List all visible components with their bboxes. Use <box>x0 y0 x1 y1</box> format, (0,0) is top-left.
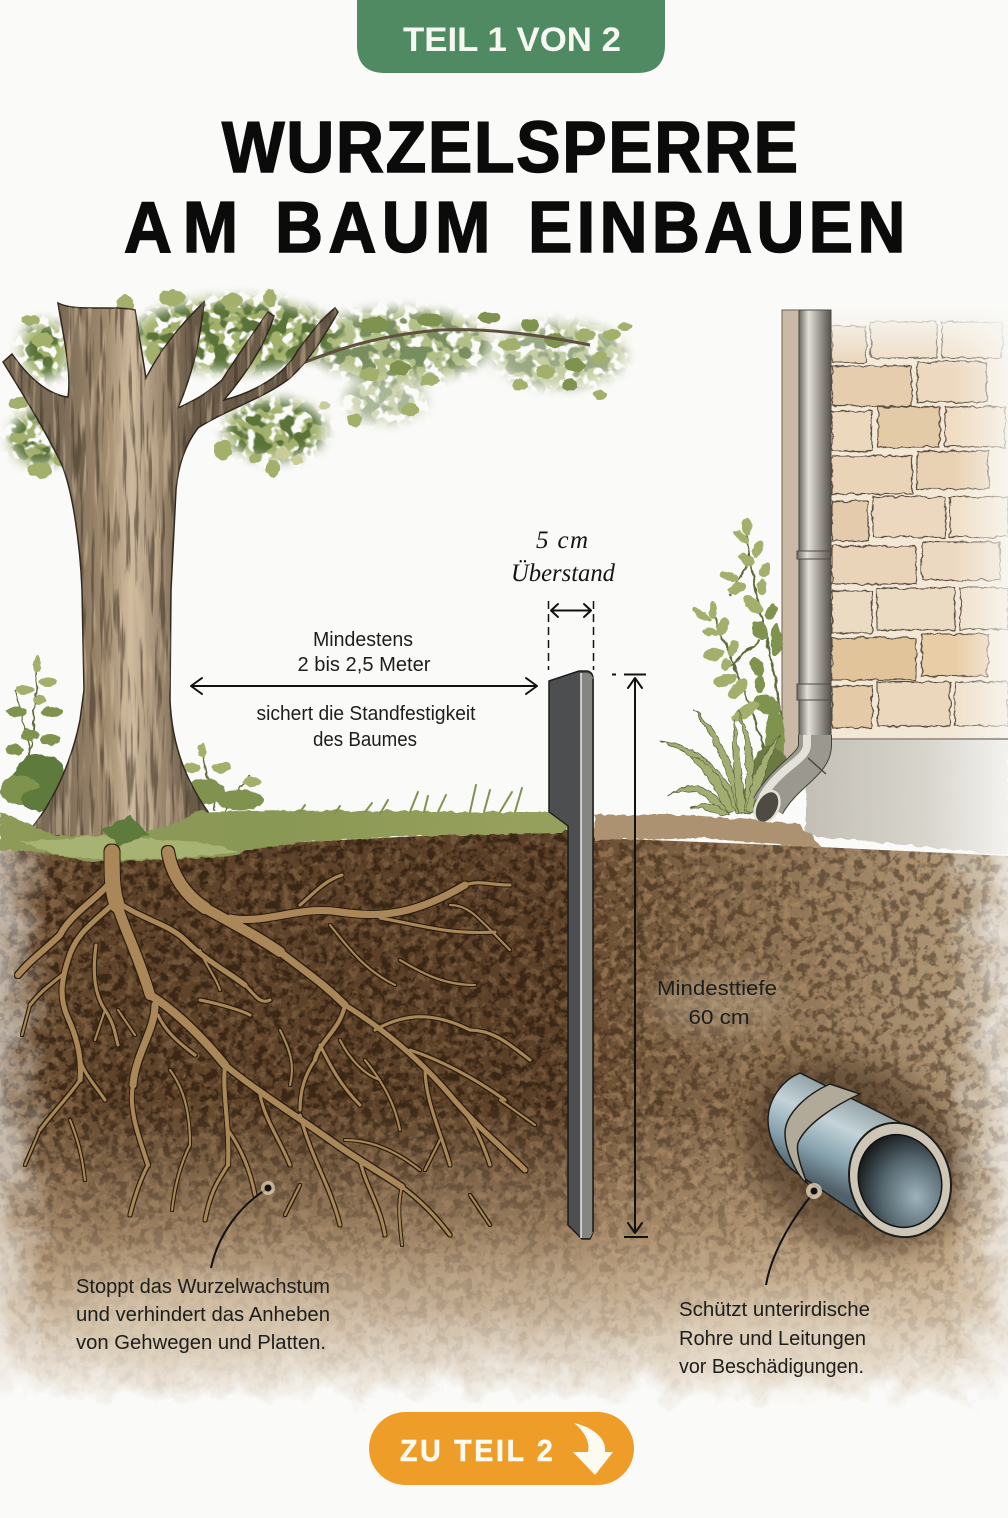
title: EINBAUEN <box>528 186 905 268</box>
dimension: distance 2 to 2.5 metres: sichert die Standfestigkeit <box>256 703 476 725</box>
dimension: minimum depth 60 cm: Mindesttiefe <box>657 978 777 1000</box>
root barrier <box>520 671 593 1239</box>
dimension: 5 cm overhang <box>511 527 615 670</box>
bricks <box>830 300 1008 740</box>
brick wall with base <box>782 300 1008 855</box>
grass wedge at barrier <box>520 812 567 833</box>
callout: pipes: Schützt unterirdische <box>679 1299 870 1321</box>
leaves <box>691 517 785 770</box>
dimension: 5 cm overhang: 5 cm <box>536 527 588 554</box>
tree roots <box>18 852 535 1245</box>
individual leaves <box>8 289 632 478</box>
wall corner edge <box>782 310 799 765</box>
title: WURZELSPERRE <box>222 106 798 188</box>
grass blades <box>660 709 780 816</box>
grass tufts <box>300 785 522 814</box>
badge: Teil 1 von 2 <box>357 0 665 73</box>
callout: roots: Stoppt das Wurzelwachstum <box>76 1276 330 1298</box>
thin branch <box>295 330 590 366</box>
pipe collar <box>785 1084 860 1183</box>
dimension: distance 2 to 2.5 metres <box>191 629 537 751</box>
title: BAUM <box>275 186 490 268</box>
dimension: distance 2 to 2.5 metres: des Baumes <box>313 729 417 751</box>
small plants left of tree <box>0 655 264 812</box>
button: Zu Teil 2: ZU TEIL 2 <box>400 1434 553 1468</box>
tree trunk <box>0 295 590 850</box>
dimension: minimum depth 60 cm <box>612 674 788 1237</box>
callout: roots: und verhindert das Anheben <box>76 1304 330 1326</box>
badge: Teil 1 von 2: TEIL 1 VON 2 <box>403 21 621 59</box>
tree canopy back leaves <box>0 285 640 485</box>
soil cross-section <box>0 820 1008 1420</box>
dimension: distance 2 to 2.5 metres: Mindestens <box>313 629 413 651</box>
downpipe <box>749 310 831 827</box>
stems <box>712 525 782 790</box>
callout: pipes: vor Beschädigungen. <box>679 1356 864 1378</box>
plant beside the wall <box>660 517 790 816</box>
dimension: distance 2 to 2.5 metres: 2 bis 2,5 Meter <box>298 654 431 676</box>
concrete base <box>806 738 1008 855</box>
icon: curved arrow <box>573 1423 613 1475</box>
dimension: 5 cm overhang: Überstand <box>511 559 615 587</box>
callout: roots: von Gehwegen und Platten. <box>76 1332 326 1354</box>
button: Zu Teil 2 <box>369 1412 634 1485</box>
callout: pipes <box>655 1183 895 1382</box>
callout: roots <box>60 1181 340 1362</box>
dimension: minimum depth 60 cm: 60 cm <box>688 1007 750 1029</box>
underground pipe <box>710 1020 1000 1290</box>
grass strip under tree <box>0 810 568 862</box>
callout: pipes: Rohre und Leitungen <box>679 1328 866 1350</box>
ground surface right <box>594 815 822 848</box>
title: AM <box>124 186 238 268</box>
title <box>124 106 905 268</box>
foliage texture <box>2 289 632 472</box>
